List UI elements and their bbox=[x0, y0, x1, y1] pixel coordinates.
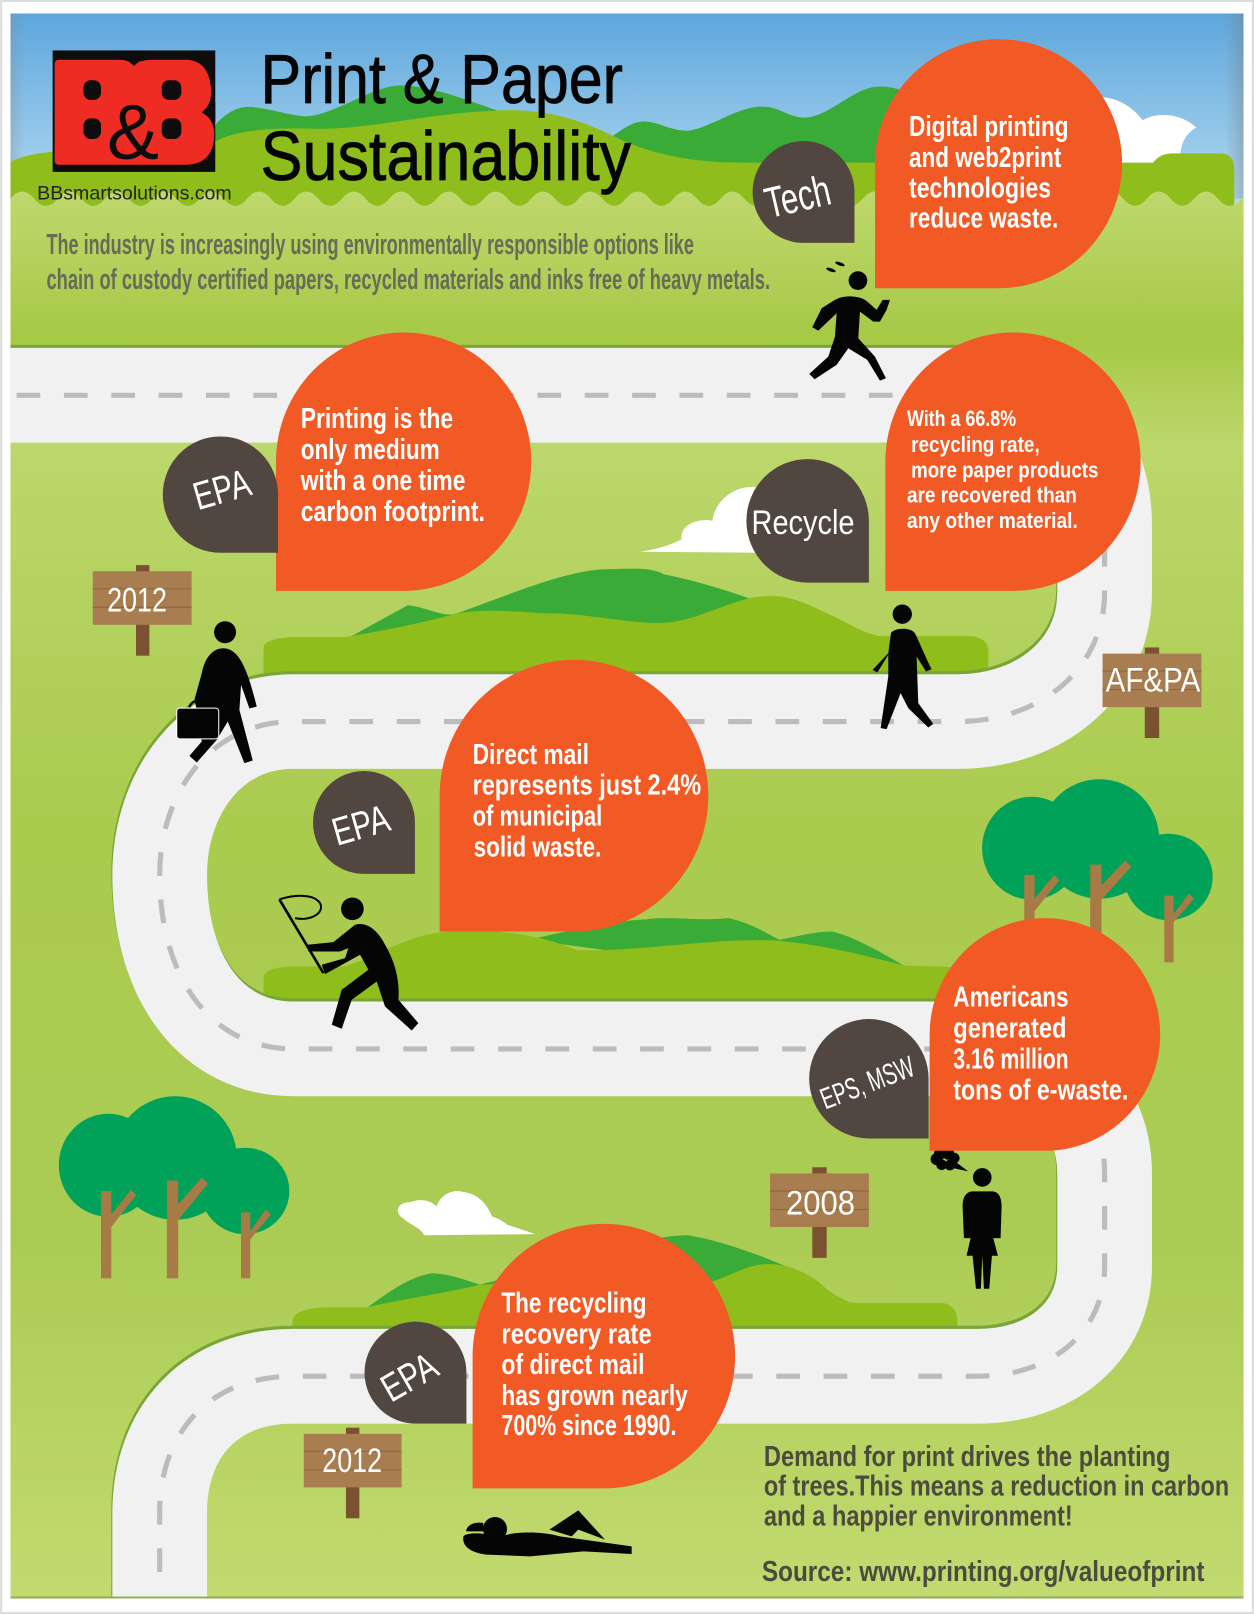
logo website: BBsmartsolutions.com bbox=[37, 183, 232, 205]
sky bbox=[10, 13, 1244, 204]
closing text bbox=[764, 1441, 1229, 1532]
top dark hills bbox=[215, 85, 900, 163]
bubble: recycling rate fact: recycling rate, bbox=[911, 432, 1040, 457]
person: walking bbox=[873, 605, 933, 729]
label bubble: EPA: EPA bbox=[327, 797, 395, 854]
bubble: carbon footprint fact: Printing is the bbox=[301, 403, 453, 435]
bubble: e-waste fact: Americans bbox=[953, 982, 1069, 1014]
bubble: recovery rate fact: of direct mail bbox=[501, 1349, 644, 1381]
winding road bbox=[0, 395, 1105, 1614]
bubble: recycling rate fact: any other material. bbox=[907, 508, 1078, 533]
bubble: recycling rate fact: With a 66.8% bbox=[907, 406, 1016, 431]
title: Sustainability bbox=[261, 117, 631, 195]
label bubble: EPA bbox=[365, 1322, 466, 1424]
bubble: carbon footprint fact: with a one time bbox=[300, 465, 465, 497]
bubble: carbon footprint fact: carbon footprint. bbox=[301, 496, 485, 528]
label bubble: EPS, MSW bbox=[809, 1019, 929, 1138]
top light hill band bbox=[10, 110, 1234, 211]
logo: B&B: B bbox=[52, 32, 124, 190]
bubble: direct mail fact: of municipal bbox=[473, 801, 602, 833]
hills: middle road loop bbox=[264, 918, 968, 999]
person: lying down bbox=[463, 1510, 632, 1556]
label bubble: EPA bbox=[313, 771, 415, 874]
label bubble: EPA: EPA bbox=[188, 461, 256, 519]
sign: 2012: 2012 bbox=[322, 1442, 382, 1480]
bubble: recycling rate fact bbox=[885, 332, 1141, 591]
cloud: top right bbox=[1103, 97, 1196, 163]
closing text: and a happier environment! bbox=[764, 1500, 1073, 1532]
bubble: e-waste fact: 3.16 million bbox=[953, 1043, 1069, 1075]
cloud: lower bbox=[398, 1191, 535, 1235]
hills: lower road loop bbox=[292, 1235, 957, 1330]
logo: B&B: & bbox=[107, 88, 159, 176]
bubble: recovery rate fact: 700% since 1990. bbox=[501, 1410, 676, 1442]
label bubble: EPS, MSW: EPS, MSW bbox=[816, 1050, 920, 1116]
label bubble: Tech: Tech bbox=[760, 167, 835, 228]
bubble: e-waste fact: generated bbox=[953, 1013, 1067, 1045]
bubble: recycling rate fact: are recovered than bbox=[907, 482, 1077, 507]
bubble: direct mail fact: represents just 2.4% bbox=[473, 770, 701, 802]
bubble: direct mail fact bbox=[440, 660, 708, 932]
road edge bbox=[0, 392, 1104, 1613]
intro text bbox=[46, 229, 770, 296]
bottom edge line bbox=[10, 1597, 1244, 1599]
logo: B&B bbox=[52, 32, 215, 190]
bubble: recovery rate fact: The recycling bbox=[501, 1287, 647, 1319]
bubble: recovery rate fact: recovery rate bbox=[501, 1318, 652, 1350]
title: Print & Paper bbox=[261, 40, 623, 118]
bubble: direct mail fact: Direct mail bbox=[473, 739, 589, 771]
bubble: recycling rate fact: more paper products bbox=[911, 458, 1098, 483]
bubble: recovery rate fact: has grown nearly bbox=[501, 1380, 688, 1412]
label bubble: Recycle bbox=[746, 459, 869, 583]
bubble: tech fact: technologies bbox=[909, 173, 1051, 205]
title bbox=[261, 40, 631, 195]
logo: B&B: B bbox=[130, 32, 203, 190]
person: walking with briefcase bbox=[177, 621, 257, 763]
sign: AF&PA bbox=[1103, 647, 1201, 738]
trees: left group bbox=[59, 1096, 289, 1278]
sign: 2012 bbox=[93, 565, 192, 656]
sign: 2008 bbox=[770, 1167, 869, 1258]
bubble: carbon footprint fact bbox=[276, 332, 531, 591]
sign: 2012: 2012 bbox=[107, 581, 167, 619]
bubble: e-waste fact: tons of e-waste. bbox=[953, 1074, 1128, 1106]
bubble: tech fact: and web2print bbox=[909, 142, 1062, 174]
sign: AF&PA: AF&PA bbox=[1106, 662, 1201, 700]
cloud: middle bbox=[640, 487, 767, 553]
bubble: tech fact: Digital printing bbox=[909, 111, 1069, 143]
closing text: Demand for print drives the planting bbox=[764, 1441, 1170, 1473]
sign: 2012 bbox=[304, 1428, 402, 1518]
bubble: tech fact: reduce waste. bbox=[909, 202, 1058, 234]
person: with butterfly net bbox=[279, 896, 418, 1030]
bubble: carbon footprint fact: only medium bbox=[301, 434, 440, 466]
label bubble: EPA: EPA bbox=[374, 1344, 446, 1411]
label bubble: EPA bbox=[163, 436, 278, 553]
label bubble: Tech bbox=[753, 141, 854, 243]
trees: right group bbox=[982, 779, 1213, 962]
label bubble: Recycle: Recycle bbox=[752, 504, 854, 542]
intro text: The industry is increasingly using environmentally responsible options like bbox=[46, 229, 694, 261]
intro text: chain of custody certified papers, recycled materials and inks free of heavy metals. bbox=[46, 264, 770, 296]
hills: upper road loop bbox=[264, 569, 988, 674]
bubble: e-waste fact bbox=[930, 918, 1160, 1151]
road centre dashes bbox=[17, 395, 1105, 1585]
sign: 2008: 2008 bbox=[786, 1185, 855, 1223]
bubble: recovery rate fact bbox=[473, 1224, 735, 1488]
side shading bbox=[10, 14, 21, 162]
bubble: tech fact bbox=[875, 39, 1122, 288]
bubble: direct mail fact: solid waste. bbox=[474, 831, 601, 863]
person: running bbox=[809, 261, 890, 381]
person: thinking woman bbox=[931, 1148, 1002, 1289]
